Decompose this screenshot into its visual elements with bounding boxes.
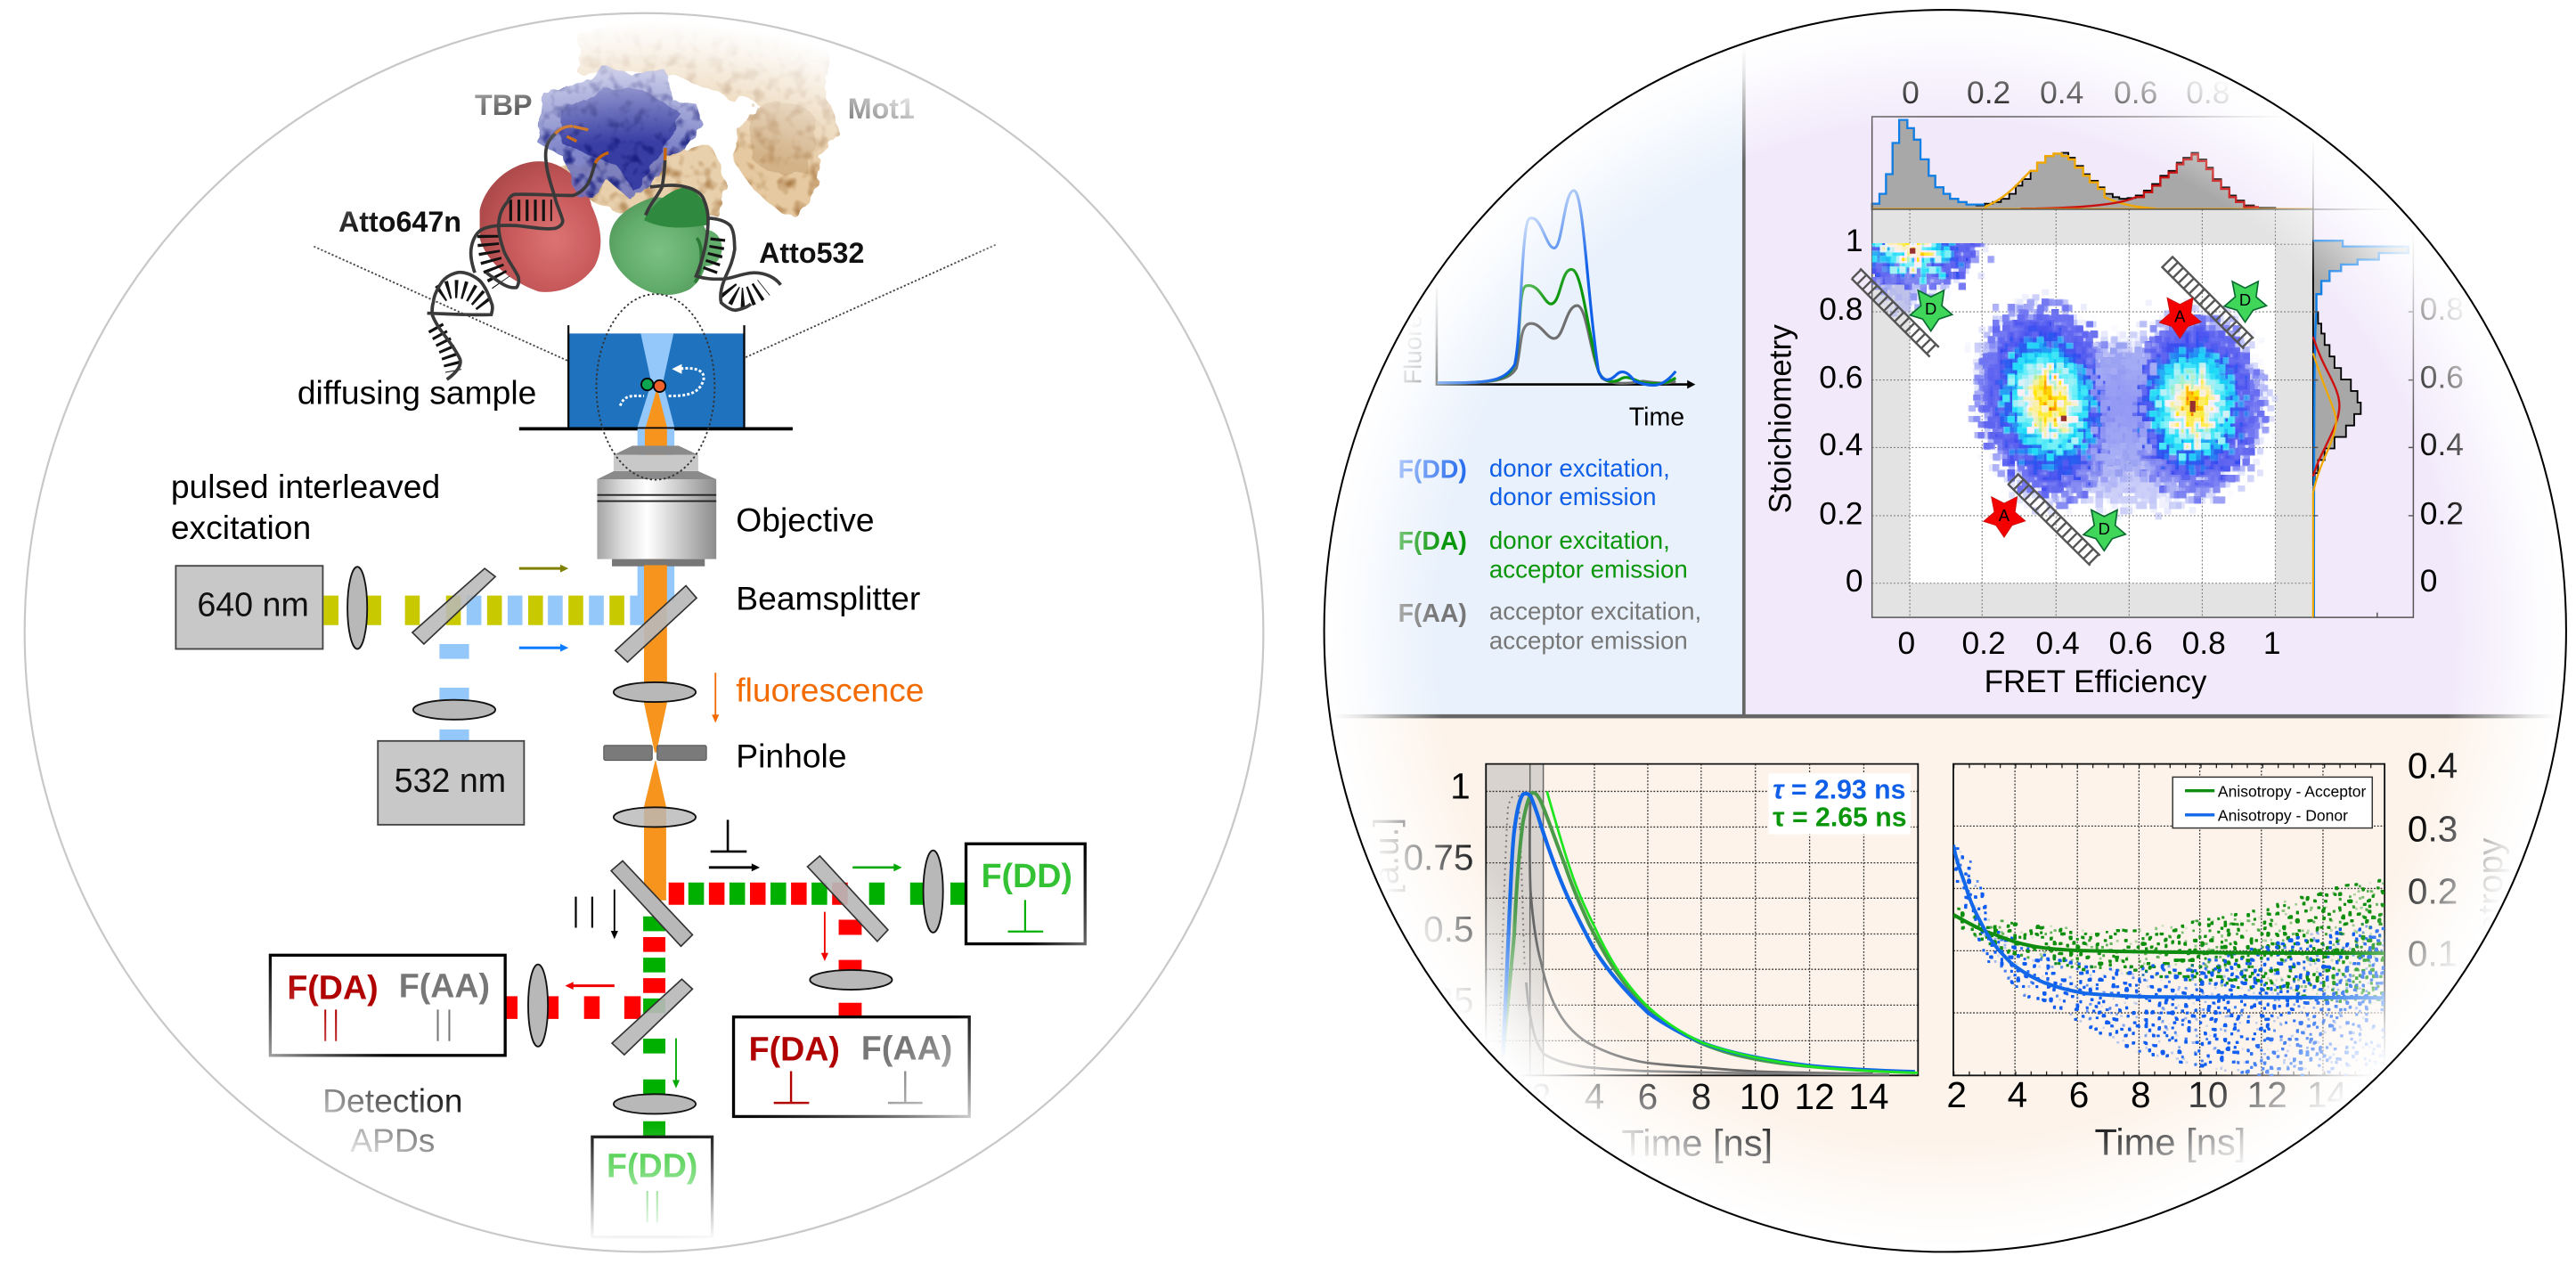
- chart: anisotropy decay: [1953, 764, 2384, 1076]
- left circle outline: [25, 13, 1263, 1252]
- detector box F(DA) and F(AA) parallel: F(DA): [287, 968, 379, 1006]
- axis labels: S scale left: 0.4: [1819, 427, 1863, 462]
- axis title: FRET Efficiency: FRET Efficiency: [1985, 665, 2207, 699]
- legend row F(AA): [1398, 597, 1701, 655]
- hot spot accents: [1910, 248, 2196, 421]
- axis labels: S scale left: 1: [1846, 223, 1863, 258]
- detector box F(DA) and F(AA) perpendicular: [734, 1017, 969, 1116]
- axis labels: anisotropy time: 8: [2131, 1074, 2151, 1115]
- arrow: perpendicular path: [709, 863, 760, 871]
- plot area: [1953, 764, 2384, 1075]
- edge fade: [1325, 10, 2566, 1252]
- axis labels: decay time: 2: [1531, 1076, 1551, 1117]
- fit: high FRET: [2021, 154, 2259, 208]
- IRF window markers: [1530, 764, 1544, 1075]
- laser box 532 nm: 532 nm: [395, 762, 506, 799]
- detector box F(DD) perpendicular: F(DD): [982, 857, 1072, 894]
- label: Detection APDs: APDs: [350, 1121, 435, 1159]
- detector box F(DD) parallel: F(DD): [607, 1146, 697, 1184]
- plot inner area: [1910, 244, 2275, 583]
- label: Fluorescence axis: Fluorescence: [1398, 237, 1426, 385]
- red pulses to right box: [839, 919, 861, 1017]
- axis labels: anisotropy: 0.4: [2408, 745, 2458, 786]
- left circle clipped content: [172, 30, 1087, 1238]
- panel background: photon traces: [1315, 0, 1743, 716]
- axis labels: intensity: 0.25: [1403, 980, 1473, 1021]
- axis labels: top E scale: 0.8: [2186, 75, 2230, 110]
- trace: F(DD): [1438, 191, 1675, 386]
- ladder and star cartoon: high FRET: D: [2239, 290, 2251, 309]
- label: TBP: TBP: [475, 89, 533, 121]
- 532 nm excitation pulses: [439, 644, 469, 743]
- axis labels: anisotropy: 0.3: [2408, 808, 2458, 849]
- axis labels: intensity: 1: [1450, 765, 1471, 806]
- right circle outline: [1325, 10, 2566, 1252]
- legend row F(DD): donor emission: [1489, 483, 1656, 510]
- axis labels: anisotropy time: 6: [2069, 1074, 2089, 1115]
- axis labels: anisotropy: [2408, 745, 2458, 974]
- ladder and star cartoon: high FRET: [2159, 257, 2267, 349]
- axis labels: S scale right: 0: [2420, 563, 2437, 599]
- plot area: [1486, 764, 1918, 1075]
- axis labels: decay time: 12: [1795, 1076, 1835, 1117]
- histogram bars: [1872, 120, 2275, 209]
- axis labels: top E scale: [1902, 75, 2230, 110]
- right circle clipped content: [1315, 0, 2576, 1264]
- axis labels: decay time: 8: [1692, 1076, 1711, 1117]
- chart: fluorescence decay: [1486, 764, 1918, 1075]
- scatter: acceptor anisotropy: [1953, 879, 2384, 1006]
- arrow: green to detector: [852, 863, 902, 871]
- objective lens: [597, 445, 716, 567]
- label: pulsed interleaved excitation: [171, 468, 440, 546]
- label: Atto647n: Atto647n: [338, 206, 461, 238]
- protein: TBP surface: [537, 65, 704, 199]
- excitation and emission beam below the stage: [638, 428, 674, 601]
- axis labels: top E scale: 0.6: [2114, 75, 2157, 110]
- red pulses to left box: [505, 996, 640, 1019]
- axis labels: S scale left: [1819, 223, 1863, 599]
- axis labels: S scale right: 0.8: [2420, 291, 2464, 327]
- axis labels: S scale left: 0.8: [1819, 291, 1863, 327]
- axis labels: intensity: 0.75: [1403, 837, 1473, 878]
- axis labels: anisotropy time: [1946, 1074, 2347, 1115]
- fit: donor: [1953, 845, 2384, 998]
- pinhole: [604, 746, 706, 761]
- panel background: FRET histogram: [1743, 0, 2576, 716]
- arrow: green parallel: [673, 1039, 680, 1089]
- baseline: [1872, 208, 2313, 210]
- protein: Mot1 surface: [552, 18, 838, 218]
- label: Time: Time: [1629, 404, 1684, 432]
- laser box 640 nm: 640 nm: [197, 586, 309, 624]
- chart: fluorescence time trace: [1398, 191, 1695, 432]
- chart: 2D ES histogram: [1848, 204, 2313, 617]
- trace: F(DA): [1438, 269, 1675, 384]
- polarised signal pulses, parallel path: [643, 917, 665, 1137]
- detector box F(DA) and F(AA) parallel: F(AA): [399, 967, 490, 1005]
- mirror: [412, 568, 495, 644]
- fit: low FRET: [1985, 153, 2156, 208]
- label: fluorescence: fluorescence: [736, 672, 925, 709]
- symbol: parallel: [575, 897, 592, 928]
- frame: [2313, 209, 2413, 617]
- axis labels: top E scale: 0.2: [1967, 75, 2010, 110]
- label: Beamsplitter: Beamsplitter: [736, 579, 920, 616]
- lens on 640 nm path: [347, 567, 367, 649]
- frame: [1872, 117, 2313, 209]
- label: pulsed interleaved excitation: pulsed interleaved: [171, 468, 440, 505]
- grid: [1486, 764, 1918, 1075]
- axis labels: S scale right: [2420, 291, 2464, 599]
- label: Detection APDs: [322, 1082, 463, 1159]
- axis labels: anisotropy: 0.2: [2408, 870, 2458, 911]
- fit: high FRET: [2313, 337, 2339, 477]
- trace: F(AA): [1438, 306, 1675, 383]
- dye: Atto532 accessible volume: [609, 187, 722, 295]
- panel background: lifetime and anisotropy: [1315, 716, 2576, 1264]
- ladder and star cartoon: low FRET: D: [2099, 519, 2110, 538]
- ladder and star cartoon: low FRET: A: [1999, 506, 2010, 525]
- detector box F(DA) and F(AA) parallel: [270, 955, 505, 1056]
- legend row F(AA): acceptor emission: [1489, 627, 1688, 655]
- axis labels: decay time: 6: [1638, 1076, 1658, 1117]
- fit: donor only: [2313, 241, 2409, 617]
- legend row F(DA): F(DA): [1398, 527, 1467, 556]
- chart: top FRET efficiency histogram: [1872, 117, 2313, 209]
- ladder and star cartoon: donor only: [1852, 268, 1952, 357]
- chart: right stoichiometry histogram: [2313, 209, 2413, 617]
- arrow: fluorescence: [712, 673, 719, 723]
- heatmap populations: [1848, 204, 2262, 517]
- dichroic on perpendicular path: [808, 856, 888, 942]
- axis title: intensity a.u.: [a.u.]: [1368, 818, 1406, 894]
- lens on 532 nm path: [413, 700, 495, 720]
- axis labels: intensity: 0.5: [1423, 909, 1473, 950]
- detector box F(DD) perpendicular: [966, 844, 1085, 944]
- dye: Atto647n accessible volume: [480, 161, 600, 292]
- label: diffusing sample: diffusing sample: [298, 374, 536, 412]
- legend row F(DA): acceptor emission: [1489, 555, 1688, 583]
- IRF shaded region: [1486, 764, 1544, 1075]
- plot margins: [1872, 209, 2313, 617]
- panel: right circle, data analysis: [1315, 0, 2576, 1264]
- axis labels: anisotropy time: 12: [2247, 1074, 2287, 1115]
- axis labels: E scale bottom: 1: [2263, 625, 2281, 661]
- axis labels: S scale right: 0.2: [2420, 495, 2464, 531]
- detector box F(DD) parallel: [592, 1137, 713, 1237]
- instrument response, donor: [1529, 795, 1873, 1073]
- label: Objective: Objective: [736, 502, 875, 539]
- legend row F(AA): F(AA): [1398, 599, 1467, 628]
- panel: left circle, microscope setup: [24, 12, 1264, 1252]
- instrument response, rising edge points: [1499, 795, 1525, 1054]
- scatter: donor anisotropy: [1953, 838, 2384, 1076]
- legend row F(DD): [1398, 454, 1670, 510]
- grid: [1872, 209, 2313, 617]
- symbol: perpendicular: [711, 820, 746, 852]
- legend row F(AA): acceptor excitation,: [1489, 597, 1701, 624]
- axis labels: decay time: 14: [1848, 1076, 1889, 1117]
- dichroic on parallel path: [612, 979, 692, 1055]
- zoom guide lines: [314, 245, 996, 373]
- DNA helix: [428, 126, 780, 379]
- lens on red parallel path: [528, 965, 548, 1047]
- axis title: Stoichiometry: Stoichiometry: [1763, 324, 1797, 513]
- frame: [1486, 764, 1918, 1075]
- legend row F(DD): F(DD): [1398, 456, 1467, 485]
- ladder and star cartoon: high FRET: A: [2174, 306, 2186, 325]
- ladder and star cartoon: donor only: D: [1925, 299, 1936, 318]
- axis labels: anisotropy: 0.1: [2408, 933, 2458, 974]
- lifetime annotation: [1768, 773, 1911, 835]
- lens to F(DD) perpendicular: [924, 851, 943, 933]
- axis labels: S scale left: 0: [1846, 563, 1863, 599]
- lens to F(DD) parallel: [614, 1094, 696, 1113]
- label: pulsed interleaved excitation: excitation: [171, 509, 311, 546]
- decay: donor data: [1503, 794, 1915, 1072]
- axis labels: anisotropy time: 2: [1946, 1074, 1967, 1115]
- fit: acceptor: [1953, 915, 2384, 953]
- frame: [1872, 209, 2313, 617]
- lifetime annotation: τ = 2.93 ns: [1773, 775, 1905, 804]
- axis labels: top E scale: 0: [1902, 75, 1920, 110]
- arrow: red parallel: [565, 982, 615, 990]
- divider horizontal: [1315, 715, 2576, 717]
- instrument response, acceptor: [1526, 983, 1889, 1074]
- laser box 532 nm: [378, 741, 524, 825]
- axis title: Anisotropy: Anisotropy: [2472, 837, 2510, 1001]
- axis title: Time ns, anisotropy: Time [ns]: [2095, 1121, 2246, 1163]
- axis title: Time ns, decay: Time [ns]: [1621, 1122, 1773, 1164]
- label: Atto532: Atto532: [759, 237, 864, 269]
- label: Pinhole: Pinhole: [736, 737, 847, 774]
- lens below beamsplitter: [614, 682, 696, 702]
- axis labels: anisotropy time: 10: [2188, 1074, 2228, 1115]
- legend row F(DA): [1398, 526, 1688, 583]
- axis labels: top E scale: 0.4: [2040, 75, 2083, 110]
- edge fade: [24, 12, 1264, 1252]
- label: Detection APDs: Detection: [322, 1082, 463, 1120]
- minor ticks: [1953, 766, 2384, 1073]
- laser box 640 nm: [175, 566, 322, 649]
- axis labels: E scale bottom: 0.6: [2109, 625, 2153, 661]
- cuvette with diffusing sample: [519, 325, 793, 428]
- arrow: blue excitation: [519, 644, 568, 652]
- detector box F(DA) and F(AA) perpendicular: F(AA): [861, 1030, 952, 1067]
- axis labels: S scale left: 0.2: [1819, 495, 1863, 531]
- divider vertical: [1743, 33, 1745, 716]
- orange fluorescence beam: [644, 565, 667, 901]
- axis labels: E scale bottom: 0.8: [2182, 625, 2226, 661]
- decay: acceptor data: [1503, 793, 1915, 1072]
- beamsplitter: [615, 586, 697, 662]
- axis labels: anisotropy time: 14: [2307, 1074, 2347, 1115]
- axis labels: E scale bottom: [1898, 625, 2281, 661]
- axis labels: E scale bottom: 0.4: [2035, 625, 2080, 661]
- arrow: parallel path: [611, 890, 618, 939]
- legend: detection channels: [1398, 454, 1701, 655]
- collimating lens: [614, 807, 696, 827]
- axis labels: S scale right: 0.4: [2420, 427, 2464, 462]
- axis labels: intensity: [1403, 765, 1473, 1021]
- axis labels: anisotropy time: 4: [2008, 1074, 2027, 1115]
- interleaved excitation pulses: [323, 596, 645, 625]
- arrow: olive excitation: [519, 565, 568, 573]
- legend: anisotropy: Anisotropy - Acceptor: [2218, 783, 2367, 801]
- legend: anisotropy: Anisotropy - Donor: [2218, 807, 2348, 825]
- grid: [1953, 764, 2384, 1075]
- fit: donor only: [1872, 120, 1985, 205]
- axes: [1437, 286, 1695, 388]
- decay: acceptor fit: [1547, 791, 1918, 1072]
- lifetime annotation: τ = 2.65 ns: [1773, 803, 1907, 832]
- frame: [1953, 764, 2384, 1075]
- arrow: red perpendicular: [821, 912, 828, 961]
- axis labels: E scale bottom: 0: [1898, 625, 1915, 661]
- legend: anisotropy: [2172, 777, 2372, 828]
- axis labels: decay time: 4: [1585, 1076, 1604, 1117]
- axis labels: decay time: [1531, 1076, 1889, 1117]
- polarised signal pulses, perpendicular path: [669, 883, 966, 905]
- axis labels: S scale right: 0.6: [2420, 359, 2464, 395]
- polarising beamsplitter: [611, 860, 692, 946]
- lens on red perpendicular path: [810, 970, 893, 990]
- detector box F(DA) and F(AA) perpendicular: F(DA): [749, 1031, 840, 1068]
- legend row F(DA): donor excitation,: [1489, 526, 1670, 554]
- ladder and star cartoon: low FRET: [1984, 474, 2125, 566]
- dotted zoom ellipse: [597, 294, 714, 480]
- histogram bars: [2313, 241, 2409, 485]
- label: Mot1: Mot1: [848, 93, 915, 125]
- axis labels: S scale left: 0.6: [1819, 359, 1863, 395]
- legend row F(DD): donor excitation,: [1489, 454, 1670, 482]
- fit: low FRET: [2313, 354, 2336, 617]
- axis labels: decay time: 10: [1740, 1076, 1780, 1117]
- axis labels: E scale bottom: 0.2: [1961, 625, 2006, 661]
